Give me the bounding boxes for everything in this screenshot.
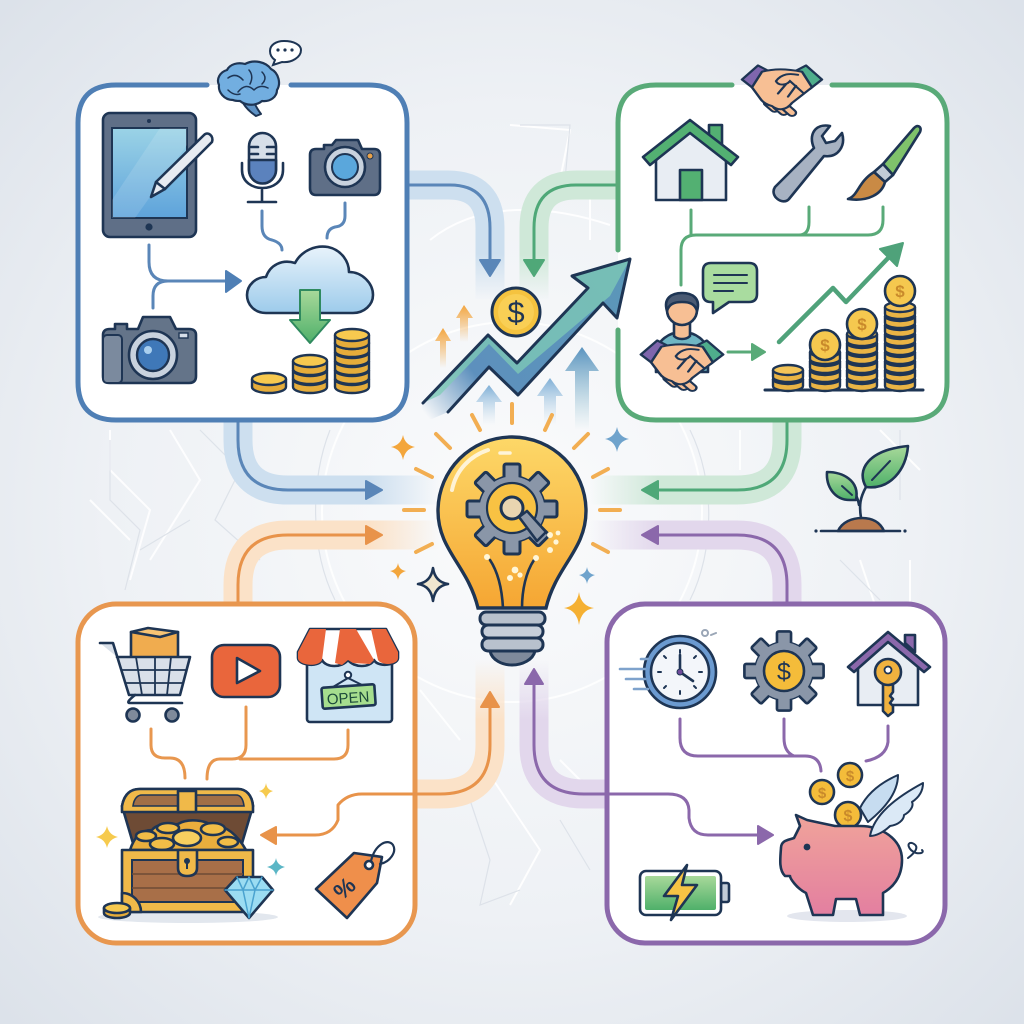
icon: house: [643, 120, 738, 200]
connector: tablet and camera arrow: [149, 245, 241, 308]
icon: house with key: [848, 632, 930, 716]
icon: clock with speed lines: [620, 630, 716, 708]
icon: green download arrow: [290, 290, 330, 343]
icon: gear with dollar: [744, 631, 824, 711]
icon: central light bulb with gear: [438, 437, 586, 665]
icon: tablet with stylus: [103, 113, 212, 237]
panel: blue content creation: [78, 85, 407, 420]
panel: green services: [618, 85, 947, 420]
connector: bulb to chest arrow: [261, 692, 499, 844]
icon: wrench: [774, 126, 843, 201]
panel: orange products: [78, 604, 499, 943]
icon: dollar coin: $: [507, 295, 525, 330]
icon: camera large: [103, 317, 196, 383]
connector: purple panel to bulb: [590, 526, 787, 610]
icon: piggy bank with wings: $: [846, 768, 855, 785]
chart: rising coin stacks: $: [857, 315, 867, 334]
icon: dollar coin: [492, 288, 540, 336]
icon: rising blue arrows: [476, 347, 599, 430]
icon: rising orange arrows: [435, 305, 473, 368]
icon: treasure chest: [98, 789, 278, 923]
icon: paintbrush: [848, 126, 921, 200]
panel: purple passive income: [525, 604, 945, 943]
connector: blue panel to bulb: [238, 415, 440, 499]
chart: rising coin stacks: $: [820, 336, 830, 355]
icon: open shop: OPEN: [326, 689, 370, 708]
icon: diamond: [225, 877, 273, 918]
icon: sparkles around bulb: [390, 427, 629, 625]
icon: gold coin stacks: [252, 329, 369, 393]
connector: products merge to chest: [151, 707, 348, 779]
icon: shopping cart: [100, 628, 190, 722]
icon: brain with speech bubble: [218, 41, 301, 116]
icon: open shop: [298, 629, 398, 722]
icon: piggy bank with wings: [780, 763, 923, 922]
icon: charging battery: [640, 865, 729, 920]
connector: mic and camera to cloud: [262, 203, 345, 250]
icon: loose coin: [104, 903, 130, 918]
icon: gear with dollar: $: [777, 658, 791, 686]
bulb screw base: [480, 612, 545, 665]
icon: handshake badge: [742, 65, 822, 117]
connector: bulb to piggy arrow: [525, 669, 773, 844]
icon: camera small: [310, 140, 380, 195]
icon: chat bubble: [703, 263, 757, 313]
icon: cloud: [247, 247, 373, 313]
connector: green panel to bulb: [590, 415, 787, 499]
connector band: bulb to orange panel: [410, 660, 490, 794]
icon: piggy bank with wings: $: [844, 808, 853, 825]
icon: sparkles: [96, 783, 285, 876]
arrow: handshake to coins: [728, 344, 765, 360]
icon: sprout: [814, 446, 908, 533]
connector: income sources merge: [680, 719, 888, 771]
icon: light rays: [404, 404, 620, 552]
connector: green panel to top centre: [524, 185, 624, 300]
icon: discount tag: [316, 842, 394, 918]
icon: discount tag: %: [328, 872, 361, 905]
icon: microphone: [242, 133, 283, 202]
connector: services merge line: [681, 207, 883, 285]
connector band: bulb to purple panel: [534, 660, 614, 794]
icon: piggy bank with wings: $: [818, 785, 827, 802]
connector: orange panel to bulb: [238, 526, 440, 610]
icon: person with handshake: [641, 293, 723, 392]
arrow: growth line: [779, 243, 903, 342]
background circuit pattern: [90, 125, 920, 905]
chart: rising coin stacks: $: [895, 282, 905, 301]
chart: rising coin stacks: [765, 276, 923, 391]
icon: video play button: [212, 645, 280, 697]
connector: blue panel to top centre: [400, 185, 500, 300]
arrow: large growth arrow: [418, 259, 630, 425]
